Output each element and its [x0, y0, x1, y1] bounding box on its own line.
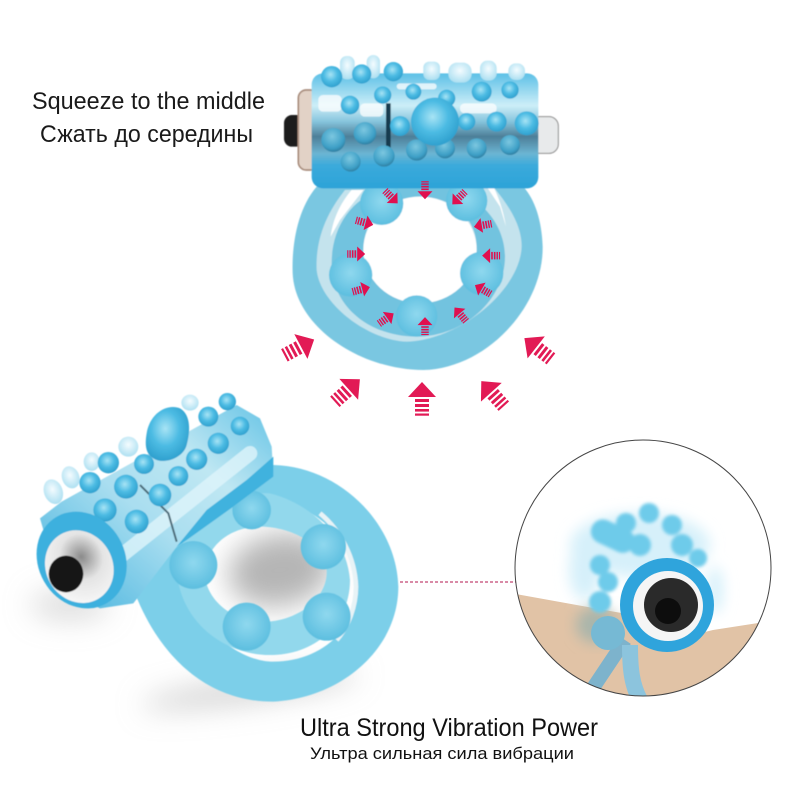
- dark recess: [644, 578, 698, 632]
- ring beads: [169, 491, 351, 651]
- black button: [49, 556, 83, 592]
- large nub: [146, 407, 189, 461]
- cylinder body: [40, 405, 273, 608]
- left metal cap: [298, 90, 318, 170]
- inner ring: [177, 493, 350, 655]
- caption: vibration power: Ultra Strong Vibration Power: [300, 714, 598, 742]
- blue glow: [569, 513, 723, 614]
- bead: [591, 616, 625, 650]
- blue end collar: [19, 495, 144, 625]
- silver highlights: [318, 83, 497, 117]
- white slits beside the collar: [331, 187, 506, 237]
- caption: squeeze to the middle: Сжать до середины: [40, 121, 253, 148]
- shadow on skin: [576, 607, 616, 643]
- large squeeze arrows: [278, 327, 560, 416]
- product photo: angled view: [19, 393, 398, 717]
- chrome end cap: [32, 518, 127, 616]
- metal end: [633, 571, 703, 641]
- black button: [284, 115, 307, 147]
- skin tone background: [518, 594, 758, 696]
- bright band on the cylinder: [120, 453, 250, 557]
- end of cylinder: [620, 558, 714, 652]
- inner ring: [332, 183, 505, 337]
- dashed leader line: [400, 581, 517, 583]
- cylinder body: [312, 73, 538, 188]
- nubs above the cylinder: [587, 503, 707, 613]
- ring strands below: [588, 639, 631, 688]
- right metal cap: [530, 117, 558, 153]
- bright nubs: [321, 62, 539, 136]
- outer ring: [135, 465, 398, 702]
- product photo: top view: [284, 55, 558, 370]
- ring beads: [329, 180, 503, 337]
- caption: squeeze to the middle: [32, 88, 265, 148]
- soft shadow: [30, 526, 361, 717]
- large centre nub: [411, 98, 459, 146]
- circle outline: [515, 440, 771, 696]
- small inner arrows: [347, 181, 500, 335]
- white gap slit: [320, 513, 356, 640]
- outer ring: [293, 187, 543, 370]
- pale nubs: [40, 395, 199, 507]
- bright nubs: [79, 393, 249, 534]
- black button: [655, 598, 681, 624]
- caption: vibration power: Ультра сильная сила вибрации: [310, 744, 574, 763]
- darker lower nubs: [321, 122, 520, 172]
- seam: [140, 485, 177, 542]
- dark seam: [386, 103, 391, 150]
- white center opening: [363, 197, 477, 303]
- detail circle: [510, 440, 771, 700]
- caption: vibration power: [300, 714, 598, 763]
- pale top nubs: [340, 55, 525, 83]
- gap between rings: [317, 187, 522, 342]
- caption: squeeze to the middle: Squeeze to the middle: [32, 88, 265, 115]
- blue underside of the cylinder: [177, 457, 273, 547]
